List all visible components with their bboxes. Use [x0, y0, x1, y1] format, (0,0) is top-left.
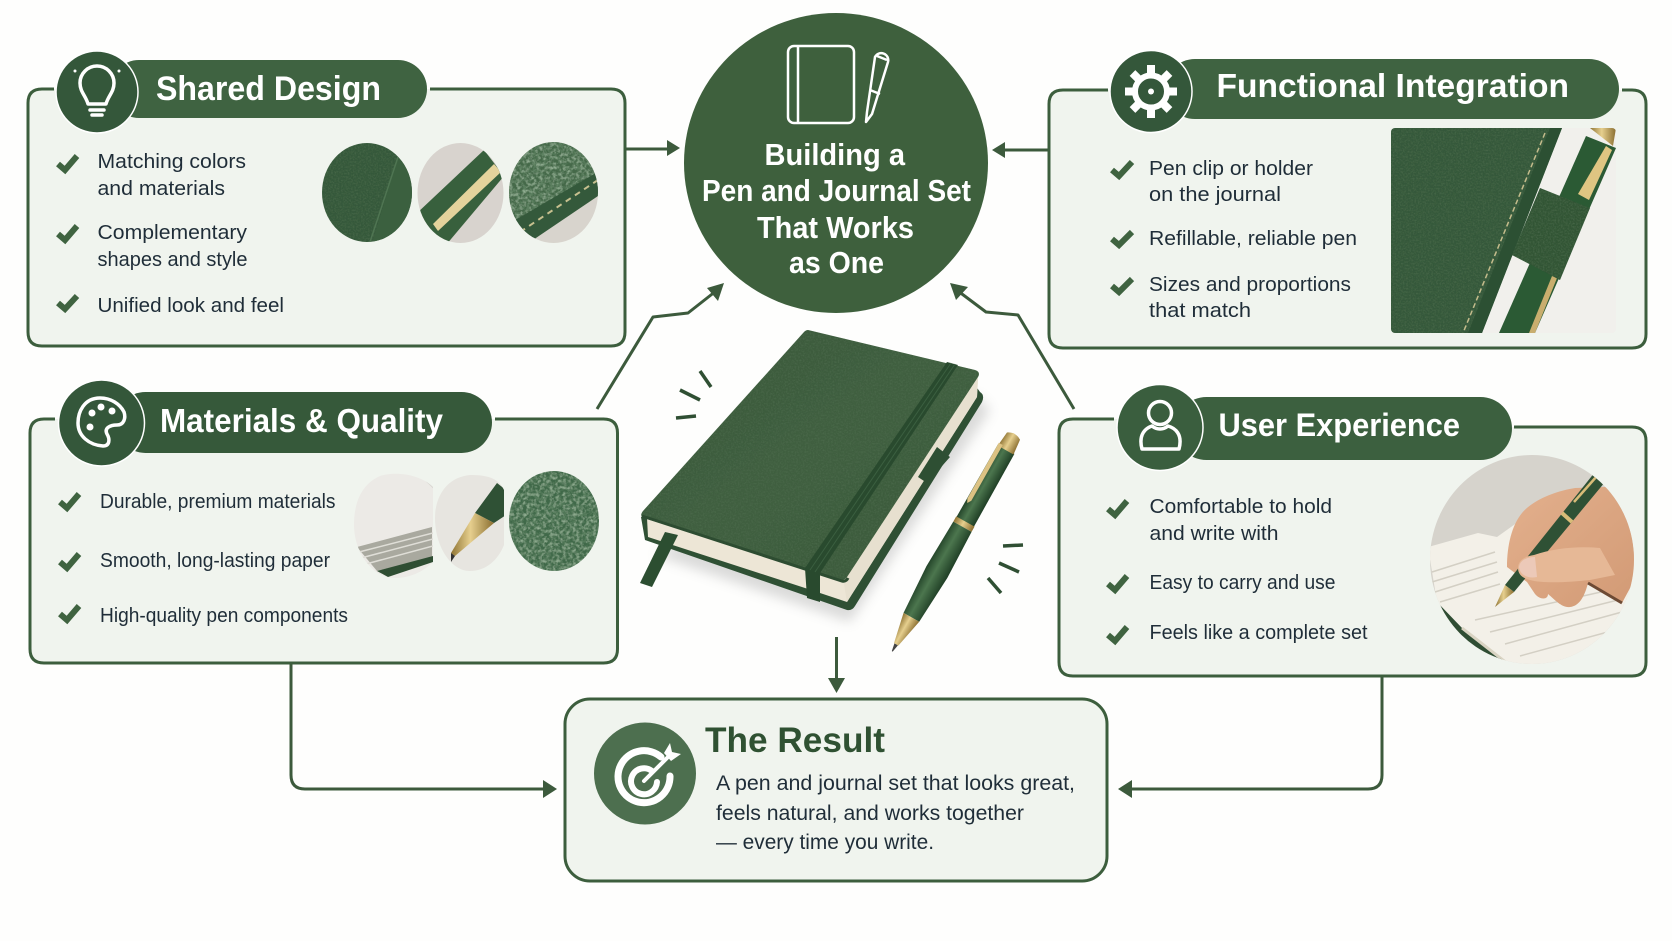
heading pill: functional integration — [1165, 59, 1619, 119]
arrow: shared design to centre — [625, 140, 680, 156]
bullet list: functional integration: that match — [1149, 299, 1251, 322]
photo: hand writing — [1428, 453, 1640, 670]
panel: functional integration — [1049, 50, 1646, 348]
title text: as One — [789, 245, 884, 280]
bullet list: materials and quality — [60, 490, 348, 627]
description: the result: feels natural, and works together — [716, 801, 1024, 825]
photo: leather detail — [322, 143, 412, 242]
icon: user — [1117, 384, 1203, 470]
heading pill: shared design: Shared Design — [156, 70, 381, 108]
cover lower lip — [642, 516, 848, 581]
photo: pen clip detail — [418, 143, 504, 243]
panel: the result — [565, 699, 1107, 881]
photo: leather texture — [509, 471, 599, 571]
heading pill: materials and quality: Materials & Quality — [160, 402, 444, 439]
bullet list: shared design: and materials — [98, 177, 225, 200]
description: the result: A pen and journal set that looks great, — [716, 771, 1075, 795]
bullet list: shared design: shapes and style — [98, 248, 248, 271]
bullet list: functional integration: Sizes and proportions — [1149, 273, 1351, 296]
icon: target — [594, 722, 696, 824]
arrow: product to result — [828, 637, 845, 693]
icon: gear — [1110, 50, 1192, 132]
bullet list: shared design: Complementary — [98, 221, 248, 244]
heading pill: user experience: User Experience — [1218, 407, 1460, 443]
heading pill: shared design — [110, 60, 427, 118]
photo: pen tip — [435, 475, 504, 571]
illustration: pen — [882, 428, 1025, 657]
title text: Building a — [764, 137, 906, 172]
bullet list: functional integration: Pen clip or holder — [1149, 157, 1313, 180]
panel: shared design — [28, 51, 625, 346]
arrow: user experience to centre — [950, 283, 1074, 409]
pen loop — [918, 447, 950, 483]
bullet list: shared design: Matching colors — [98, 150, 246, 173]
panel: user experience — [1059, 384, 1646, 676]
bullet list: materials and quality: Durable, premium materials — [100, 490, 336, 513]
bullet list: materials and quality: Smooth, long-lasting paper — [100, 549, 330, 572]
arrow: functional integration to centre — [992, 142, 1049, 158]
arrow: materials to result — [291, 663, 557, 798]
centre circle: title — [684, 13, 988, 313]
heading: the result: The Result — [705, 721, 885, 760]
bullet list: shared design — [58, 150, 284, 317]
description: the result — [716, 771, 1075, 854]
title text: Pen and Journal Set — [702, 173, 971, 208]
description: the result: — every time you write. — [716, 830, 934, 854]
bullet list: shared design: Unified look and feel — [98, 294, 284, 317]
bullet list: user experience: Feels like a complete set — [1150, 621, 1368, 644]
title text — [702, 137, 971, 280]
bullet list: functional integration — [1112, 157, 1357, 322]
panel: materials and quality — [30, 380, 618, 663]
heading pill: functional integration: Functional Integration — [1216, 67, 1569, 104]
bullet list: materials and quality: High-quality pen components — [100, 604, 348, 627]
icon: notebook and pen — [788, 46, 888, 123]
ribbon bookmark — [640, 532, 678, 587]
bullet list: user experience: and write with — [1150, 522, 1278, 545]
elastic band — [805, 362, 958, 602]
bullet list: user experience: Easy to carry and use — [1150, 571, 1336, 594]
icon: light bulb — [56, 51, 138, 133]
sparkle lines: right of pen — [988, 545, 1023, 593]
journal cover — [641, 330, 979, 580]
illustration: journal — [640, 330, 990, 622]
title text: That Works — [757, 210, 914, 245]
photo: paper edge — [354, 474, 433, 578]
heading pill: materials and quality — [115, 392, 492, 453]
arrow: user experience to result — [1118, 676, 1382, 798]
photo: stitched leather — [509, 142, 598, 243]
bullet list: user experience — [1108, 495, 1368, 644]
bullet list: functional integration: Refillable, reliable pen — [1149, 227, 1357, 250]
arrow: materials to centre — [597, 283, 724, 409]
heading pill: user experience — [1175, 397, 1512, 460]
bullet list: user experience: Comfortable to hold — [1150, 495, 1332, 518]
icon: palette — [58, 380, 144, 466]
photo: journal with pen holder — [1391, 128, 1616, 333]
sparkle lines: left of journal — [676, 371, 711, 418]
bullet list: functional integration: on the journal — [1149, 183, 1281, 206]
